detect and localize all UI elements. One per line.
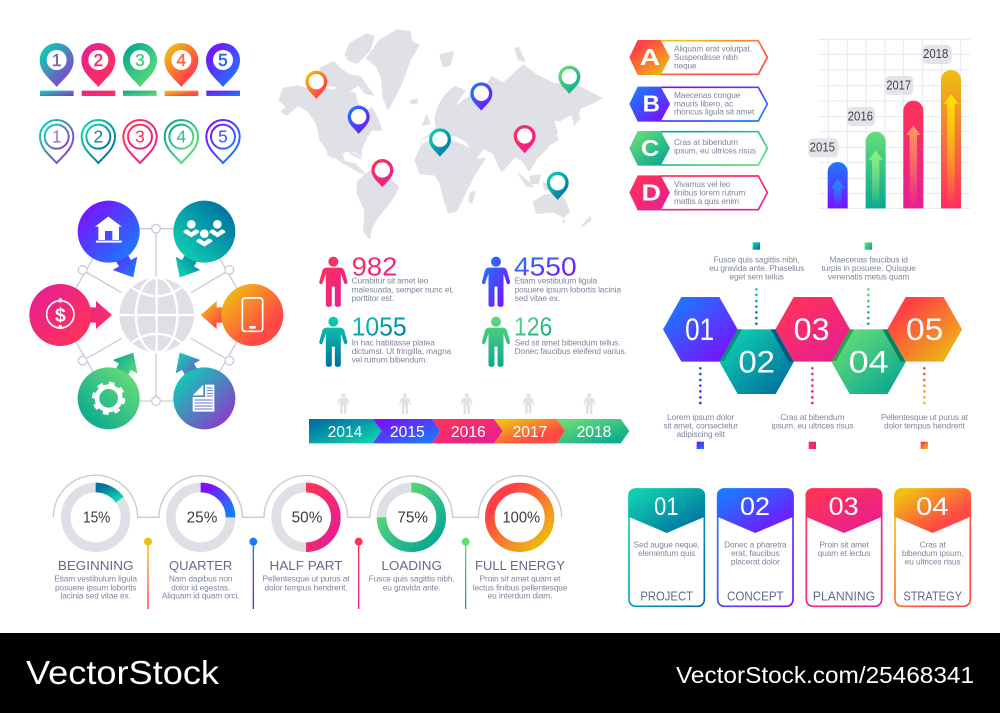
block LOADING: eu gravida ante. bbox=[383, 582, 441, 592]
timeline segment 2017 bbox=[494, 419, 565, 443]
stat 4550: 4550 bbox=[514, 252, 577, 282]
dotted connector 01 bbox=[699, 367, 702, 404]
block LOADING: LOADING bbox=[381, 558, 442, 573]
map pin: orange bbox=[305, 71, 327, 99]
solid pin 1 bbox=[40, 43, 74, 87]
icon: home circle bbox=[78, 201, 140, 263]
caption 02: Fusce quis sagittis nibh, bbox=[714, 255, 800, 265]
block FULL ENERGY: eu interdum diam. bbox=[488, 591, 552, 601]
panel: hub and spoke diagram bbox=[29, 201, 283, 429]
timeline segment 2017: 2017 bbox=[513, 424, 547, 441]
label 2015: 2015 bbox=[810, 141, 835, 155]
stat 1055: 1055 bbox=[352, 312, 407, 342]
label A bbox=[629, 40, 767, 75]
caption 02: eu gravida ante. Phasellus bbox=[709, 263, 804, 273]
timeline segment 2016: 2016 bbox=[451, 424, 486, 441]
block BEGINNING: lacinia sed vitae ex. bbox=[61, 591, 131, 601]
dotted connector 03 bbox=[811, 367, 814, 404]
caption 01: adipiscing elit bbox=[677, 429, 726, 439]
caption 03 bbox=[771, 412, 853, 430]
card 03 planning: Proin sit amet bbox=[819, 539, 869, 549]
timeline segment 2014 bbox=[309, 419, 382, 443]
block QUARTER: dolor id egestas. bbox=[171, 582, 230, 592]
label A: neque bbox=[674, 60, 697, 70]
footer bar bbox=[0, 633, 1000, 713]
block QUARTER: Nam dapibus non bbox=[169, 574, 233, 584]
caption 01 bbox=[663, 412, 738, 439]
label B: mauris libero, ac bbox=[674, 98, 733, 108]
hexagon 02 bbox=[719, 329, 794, 394]
block LOADING bbox=[369, 558, 455, 592]
solid pin 1: 1 bbox=[52, 50, 61, 70]
block FULL ENERGY: FULL ENERGY bbox=[475, 558, 565, 573]
caption 04: turpis in posuere. Quisque bbox=[822, 263, 916, 273]
hexagon 05: 05 bbox=[906, 312, 943, 347]
ring 100 percent bbox=[490, 487, 549, 547]
solid pin 5 bbox=[206, 43, 240, 87]
caption 05: dolor tempus hendrerit bbox=[884, 420, 966, 430]
caption 01: sit amet, consectetur bbox=[663, 420, 738, 430]
map pin: teal africa bbox=[429, 128, 451, 157]
ring 50 percent bbox=[276, 487, 336, 547]
label 2016: 2016 bbox=[848, 109, 873, 123]
stat 4550 bbox=[482, 252, 621, 307]
card 01 project: elementum quis bbox=[638, 548, 695, 558]
card 01 project: 01 bbox=[654, 493, 678, 521]
block BEGINNING: Etiam vestibulum ligula bbox=[54, 574, 137, 584]
block QUARTER: Aliquam id quam orci. bbox=[162, 591, 239, 601]
bar 2015 bbox=[828, 162, 848, 208]
label B bbox=[629, 87, 767, 122]
label A: Suspendisse nibh bbox=[674, 52, 738, 62]
block QUARTER: QUARTER bbox=[169, 558, 232, 573]
block HALF PART: HALF PART bbox=[269, 558, 343, 573]
dotted connector 05 bbox=[923, 367, 926, 404]
stat 1055 bbox=[319, 312, 452, 367]
card 02 concept: Donec a pharetra bbox=[724, 539, 787, 549]
label C: C bbox=[641, 135, 659, 161]
solid pin 2 bbox=[81, 43, 115, 87]
panel: world map bbox=[279, 30, 602, 238]
caption 04: Maecenas faucibus id bbox=[830, 255, 908, 265]
map pin: blue bbox=[348, 106, 370, 134]
solid pin 5: 5 bbox=[218, 50, 228, 70]
timeline segment 2015: 2015 bbox=[390, 424, 425, 441]
label 2017: 2017 bbox=[886, 78, 911, 92]
hexagon 04: 04 bbox=[849, 344, 889, 379]
hexagon 01: 01 bbox=[685, 312, 714, 347]
label D: finibus lorem rutrum bbox=[674, 187, 745, 197]
card 02 concept bbox=[717, 488, 794, 606]
panel: people statistics bbox=[309, 252, 629, 443]
stat 982: malesuada, semper nunc et, bbox=[352, 284, 454, 294]
bar 2018 bbox=[941, 70, 961, 208]
stem marker yellow bbox=[144, 538, 152, 609]
ring 15 percent: 15% bbox=[83, 509, 110, 526]
card 03 planning: quam et lectus bbox=[818, 548, 870, 558]
icon: document circle bbox=[173, 367, 235, 429]
card 04 strategy: STRATEGY bbox=[903, 590, 962, 604]
card 04 strategy: 04 bbox=[916, 493, 949, 521]
arrow: gear to globe bbox=[110, 353, 137, 384]
block HALF PART bbox=[262, 558, 350, 592]
panel: step cards bbox=[628, 488, 971, 606]
card 02 concept: erat, faucibus bbox=[731, 548, 780, 558]
arrow: people to globe bbox=[176, 246, 203, 277]
label 2018: 2018 bbox=[923, 47, 948, 61]
block FULL ENERGY: lectus finibus pellentesque bbox=[473, 582, 568, 592]
label D bbox=[629, 175, 767, 210]
card 01 project bbox=[628, 488, 705, 606]
stem marker pink bbox=[355, 538, 363, 609]
stat 1055: vel rutrum bibendum. bbox=[352, 354, 428, 364]
block HALF PART: dolor tempus hendrerit. bbox=[265, 582, 347, 592]
timeline segment 2018 bbox=[557, 419, 629, 443]
ring 25 percent bbox=[171, 487, 230, 547]
outline pin 3: 3 bbox=[135, 127, 145, 147]
caption 02 bbox=[709, 255, 804, 282]
ring 100 percent: 100% bbox=[502, 509, 540, 526]
label C bbox=[629, 131, 767, 166]
stat 1055: dictumst. Ut fringilla, magna bbox=[352, 346, 452, 356]
map pin: pink asia bbox=[514, 125, 536, 153]
card 02 concept: 02 bbox=[740, 493, 770, 521]
label B: B bbox=[643, 91, 660, 117]
hexagon 03 bbox=[775, 297, 850, 362]
panel: hexagon process bbox=[663, 242, 969, 449]
ring 50 percent: 50% bbox=[292, 509, 322, 526]
card 04 strategy: eu ultrices risus bbox=[905, 556, 961, 566]
icon: people circle bbox=[173, 201, 235, 263]
label B: rhoncus ligula sit amet bbox=[674, 107, 755, 117]
card 03 planning: 03 bbox=[829, 493, 859, 521]
icon: gear circle bbox=[78, 367, 140, 429]
pin underline bars bbox=[40, 91, 240, 96]
hexagon 01 bbox=[663, 297, 738, 362]
label D: mattis a quis enim bbox=[674, 196, 739, 206]
solid pin 3 bbox=[123, 43, 157, 87]
card 01 project: PROJECT bbox=[640, 590, 693, 604]
ring 15 percent bbox=[66, 487, 125, 547]
block QUARTER bbox=[162, 558, 239, 601]
timeline segment 2014: 2014 bbox=[328, 424, 363, 441]
dotted connector 04 bbox=[867, 288, 870, 325]
stat 982: Curabitur sit amet leo bbox=[352, 276, 429, 286]
caption 05: Pellentesque ut purus at bbox=[881, 412, 969, 422]
solid pin 2: 2 bbox=[94, 50, 103, 70]
stat 982 bbox=[319, 252, 454, 307]
bar 2017 bbox=[903, 101, 923, 208]
network lines bbox=[60, 229, 252, 401]
label B: Maecenas congue bbox=[674, 90, 741, 100]
card 01 project: Sed augue neque, bbox=[634, 539, 700, 549]
outline pin 5: 5 bbox=[218, 127, 228, 147]
stat 4550: Etiam vestibulum ligula bbox=[515, 276, 598, 286]
ring 25 percent: 25% bbox=[187, 509, 217, 526]
label C: ipsum, eu ultrices risus bbox=[674, 145, 756, 155]
stat 126: 126 bbox=[514, 312, 552, 342]
bar chart bbox=[808, 39, 970, 208]
block FULL ENERGY: Proin sit amet quam et bbox=[480, 574, 561, 584]
card 04 strategy: bibendum ipsum, bbox=[902, 548, 963, 558]
stat 4550: posuere ipsum lobortis lacinia bbox=[515, 284, 621, 294]
stat 1055: In hac habitasse platea bbox=[352, 337, 435, 347]
world map landmass bbox=[279, 30, 602, 238]
icon: dollar circle: $ bbox=[55, 305, 66, 326]
hexagon 04 bbox=[831, 329, 906, 394]
map pin: blue russia bbox=[470, 82, 492, 111]
outline pin 3 bbox=[123, 120, 157, 163]
label 2017 bbox=[885, 76, 913, 95]
label A: Aliquam erat volutpat. bbox=[674, 44, 752, 54]
connecting arc line bbox=[53, 475, 562, 517]
icon: globe bbox=[119, 278, 194, 352]
solid pin 4 bbox=[164, 43, 198, 87]
panel: numbered map pins bbox=[40, 43, 240, 163]
card 02 concept: placerat dolor bbox=[731, 556, 780, 566]
timeline arrow bbox=[309, 419, 629, 443]
caption 04: venenatis metus quam bbox=[828, 272, 910, 282]
stat 982: 982 bbox=[352, 252, 397, 282]
timeline segment 2016 bbox=[432, 419, 503, 443]
caption 04 bbox=[822, 255, 916, 282]
stem marker blue bbox=[249, 538, 257, 609]
marker squares bbox=[697, 242, 928, 449]
grey people row bbox=[338, 393, 595, 414]
caption 01: Lorem ipsum dolor bbox=[667, 412, 735, 422]
panel: progress rings bbox=[53, 475, 568, 609]
label D: Vivamus vel leo bbox=[674, 179, 731, 189]
card 04 strategy: Cras at bbox=[920, 539, 946, 549]
card 02 concept: CONCEPT bbox=[727, 590, 784, 604]
map pin: green bbox=[558, 66, 580, 94]
label 2015 bbox=[808, 138, 838, 157]
block LOADING: Fusce quis sagittis nibh, bbox=[369, 574, 455, 584]
bar 2016 bbox=[866, 132, 886, 208]
brand name: VectorStock bbox=[26, 654, 220, 691]
hexagon 02: 02 bbox=[738, 344, 775, 379]
network nodes bbox=[78, 224, 234, 405]
stat 126 bbox=[482, 312, 627, 367]
solid pin 3: 3 bbox=[135, 50, 145, 70]
block BEGINNING: posuere ipsum lobortis bbox=[55, 582, 136, 592]
map pin: teal australia bbox=[547, 172, 569, 200]
map pin: pink south america bbox=[371, 159, 393, 187]
arrow: dollar to globe bbox=[83, 301, 112, 329]
ring 75 percent: 75% bbox=[397, 509, 428, 526]
outline pin 5 bbox=[206, 120, 240, 163]
block FULL ENERGY bbox=[473, 558, 568, 601]
timeline segment 2015 bbox=[373, 419, 440, 443]
label D: D bbox=[642, 179, 661, 205]
ring 75 percent bbox=[381, 487, 441, 547]
outline pin 2: 2 bbox=[94, 127, 103, 147]
label C: Cras at bibendum bbox=[674, 137, 738, 147]
arrow: phone to globe bbox=[201, 301, 230, 329]
label 2016 bbox=[847, 107, 875, 126]
card 03 planning: PLANNING bbox=[813, 590, 875, 604]
timeline segment 2018: 2018 bbox=[577, 424, 612, 441]
block BEGINNING bbox=[54, 558, 137, 601]
icon: dollar circle bbox=[29, 284, 91, 346]
caption 03: Cras at bibendum bbox=[780, 412, 844, 422]
hexagon 03: 03 bbox=[794, 312, 830, 347]
solid pin 4: 4 bbox=[177, 50, 187, 70]
caption 02: eget sem tellus bbox=[730, 272, 784, 282]
stat 982: porttitor est. bbox=[352, 293, 394, 303]
stat 126: Donec faucibus eleifend varius. bbox=[515, 346, 627, 356]
arrow: home to globe bbox=[110, 246, 137, 277]
outline pin 4: 4 bbox=[177, 127, 187, 147]
block HALF PART: Pellentesque ut purus at bbox=[262, 574, 350, 584]
stat 4550: sed vitae ex. bbox=[515, 293, 560, 303]
panel: A B C D labels bbox=[629, 39, 970, 210]
dotted connector 02 bbox=[755, 288, 758, 325]
outline pin 1 bbox=[40, 120, 73, 163]
icon: phone circle bbox=[221, 284, 283, 346]
block BEGINNING: BEGINNING bbox=[58, 558, 133, 573]
image reference: VectorStock.com/25468341 bbox=[676, 662, 974, 688]
card 04 strategy bbox=[894, 488, 971, 606]
hexagon 05 bbox=[887, 297, 962, 362]
stat 126: Sed sit amet bibendum tellus. bbox=[515, 337, 621, 347]
outline pin 2 bbox=[82, 120, 115, 163]
outline pin 4 bbox=[165, 120, 198, 163]
caption 03: ipsum, eu ultrices risus bbox=[771, 420, 853, 430]
outline pin 1: 1 bbox=[52, 127, 61, 147]
label A: A bbox=[640, 44, 660, 70]
caption 05 bbox=[881, 412, 969, 430]
arrow: document to globe bbox=[176, 353, 203, 384]
stem marker green bbox=[462, 538, 470, 609]
card 03 planning bbox=[806, 488, 882, 606]
